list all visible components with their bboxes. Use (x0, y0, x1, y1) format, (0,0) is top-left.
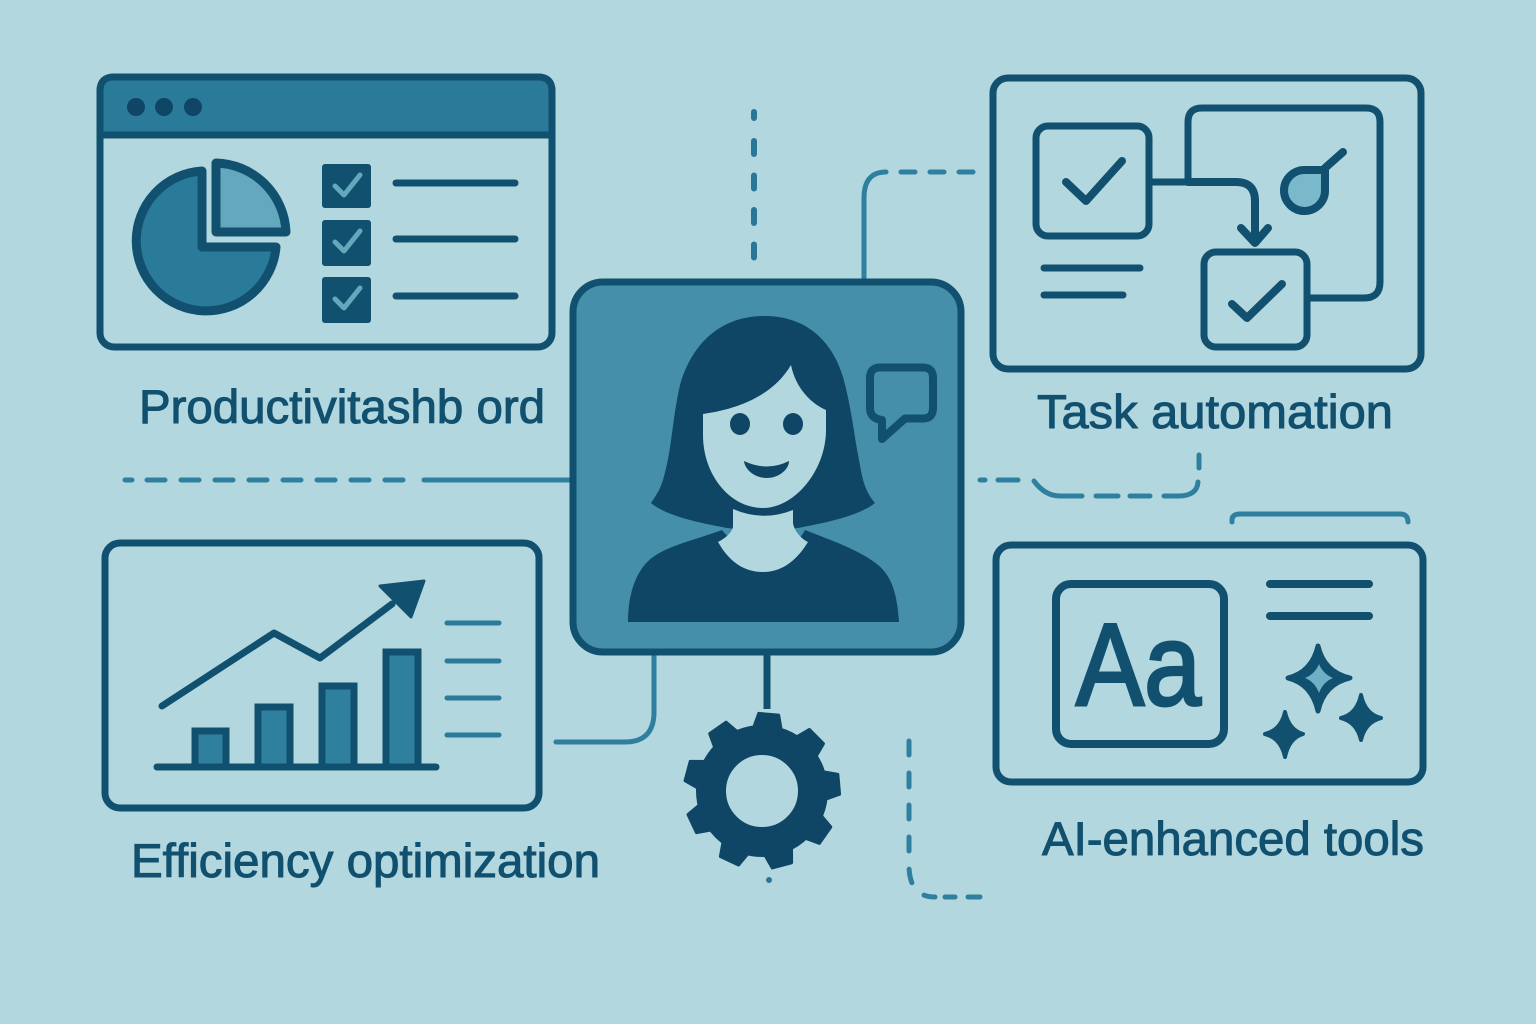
avatar face (703, 365, 826, 508)
connector dot (766, 877, 772, 883)
icon: pie chart (136, 163, 286, 311)
task box 2 (1204, 252, 1307, 347)
trend arrow (162, 581, 424, 706)
icon: sparkles (1265, 646, 1381, 757)
panel: central avatar (573, 282, 961, 652)
avatar body (628, 530, 899, 622)
avatar hair (651, 316, 875, 530)
heading: productivity dashboard: Productivitashb ord (139, 380, 545, 433)
flow connectors (1150, 108, 1380, 298)
text lines (1270, 584, 1369, 616)
font sample: Aa (1076, 599, 1202, 730)
icon: magnifier (1284, 170, 1325, 211)
icon: font box (1056, 584, 1224, 744)
heading: efficiency optimization: Efficiency optimization (131, 834, 600, 887)
panel: productivity dashboard (100, 77, 552, 347)
avatar eyes (730, 413, 803, 435)
heading: AI-enhanced tools: AI-enhanced tools (1042, 812, 1424, 865)
text lines (1044, 268, 1140, 295)
title bar (100, 77, 552, 135)
heading: task automation: Task automation (1037, 385, 1393, 438)
checklist (322, 164, 515, 323)
panel: task automation (993, 78, 1421, 369)
connector: avatar to gear (764, 654, 770, 709)
panel: AI-enhanced tools (996, 545, 1423, 782)
window dots (127, 98, 202, 116)
avatar smile (744, 461, 789, 478)
icon: gear (684, 713, 840, 869)
connector lines (125, 112, 1408, 897)
bar chart (195, 652, 418, 767)
panel: efficiency optimization (105, 543, 539, 808)
avatar neck (718, 509, 808, 572)
task box 1 (1036, 126, 1149, 236)
icon: speech bubble (870, 368, 933, 439)
legend lines (447, 623, 499, 735)
